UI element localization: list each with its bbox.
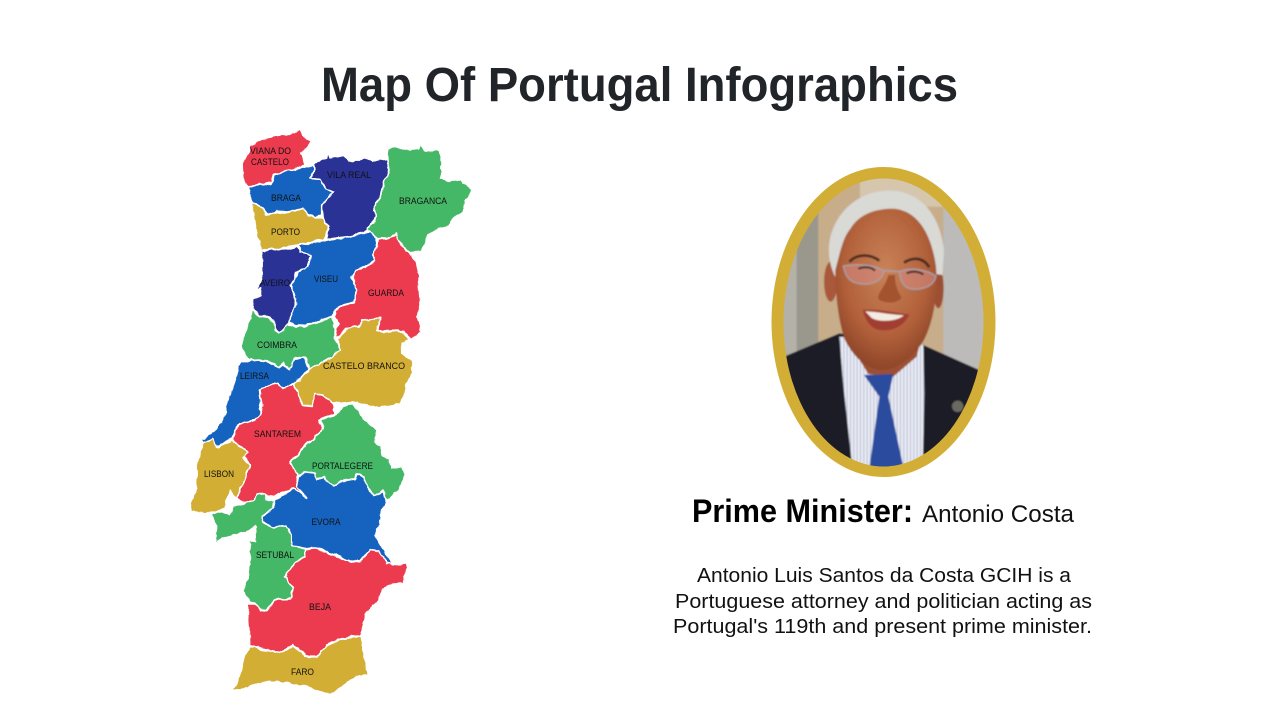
region: Lisbon [190, 439, 250, 513]
region: Evora: EVORA [312, 517, 340, 527]
region: Braganca [368, 144, 473, 253]
region: Viseu [289, 232, 377, 326]
region: Coimbra: COIMBRA [257, 340, 297, 350]
region: Faro: FARO [291, 667, 314, 677]
hair [829, 191, 944, 277]
heading: prime minister: Antonio Costa [922, 501, 1075, 528]
tie [864, 374, 904, 470]
portrait: prime minister in gold oval frame [772, 167, 996, 477]
region: Porto [252, 203, 328, 251]
region: Viana do Castelo: VIANA DO [250, 146, 291, 156]
region: Setubal [211, 493, 306, 610]
region: Vila Real: VILA REAL [327, 170, 371, 180]
region: Viana do Castelo: CASTELO [251, 157, 289, 167]
region: Castelo Branco: CASTELO BRANCO [323, 361, 405, 371]
region: Braga [248, 165, 333, 217]
region: Guarda [334, 233, 422, 340]
gold frame [772, 167, 996, 477]
region: Portalegere [290, 403, 406, 502]
region: Aveiro: AVEIRO [260, 278, 290, 288]
region: Viseu: VISEU [314, 274, 338, 284]
region: Portalegere: PORTALEGERE [312, 461, 373, 471]
photo [784, 178, 984, 466]
glasses [843, 265, 884, 284]
region: Porto: PORTO [271, 227, 300, 237]
region: Guarda: GUARDA [368, 288, 404, 298]
region: Setubal: SETUBAL [256, 550, 294, 560]
region: Santarem: SANTAREM [254, 429, 301, 439]
region: Beja [248, 548, 408, 657]
region: Castelo Branco [294, 318, 413, 407]
heading: prime minister: Prime Minister: [692, 493, 913, 529]
shirt [839, 337, 924, 470]
text block: biography: Portugal's 119th and present prime minister. [673, 615, 1092, 638]
region: Vila Real [310, 153, 389, 239]
region: Evora [262, 472, 392, 565]
region: Faro [233, 636, 368, 695]
region: Aveiro [252, 246, 311, 333]
region: Braga: BRAGA [271, 193, 301, 203]
region: Beja: BEJA [309, 602, 331, 612]
title: Map Of Portugal Infographics [321, 59, 958, 112]
region: Leirsa [201, 357, 308, 447]
face [835, 209, 936, 370]
region: Santarem [233, 383, 335, 503]
region: Leirsa: LEIRSA [240, 371, 269, 381]
suit [786, 332, 978, 459]
ears [824, 262, 837, 302]
mouth [863, 310, 909, 330]
region: Lisbon: LISBON [204, 469, 234, 479]
region: Braganca: BRAGANCA [399, 196, 447, 206]
text block: biography: Portuguese attorney and politician acting as [675, 590, 1092, 613]
region: Viana do Castelo [243, 129, 311, 188]
map of Portugal [190, 129, 473, 695]
neck [860, 346, 920, 378]
heading: prime minister [692, 493, 1075, 529]
text block: biography [673, 564, 1092, 638]
nose [878, 275, 902, 303]
region: Coimbra [241, 310, 340, 370]
text block: biography: Antonio Luis Santos da Costa GCIH is a [697, 564, 1072, 587]
